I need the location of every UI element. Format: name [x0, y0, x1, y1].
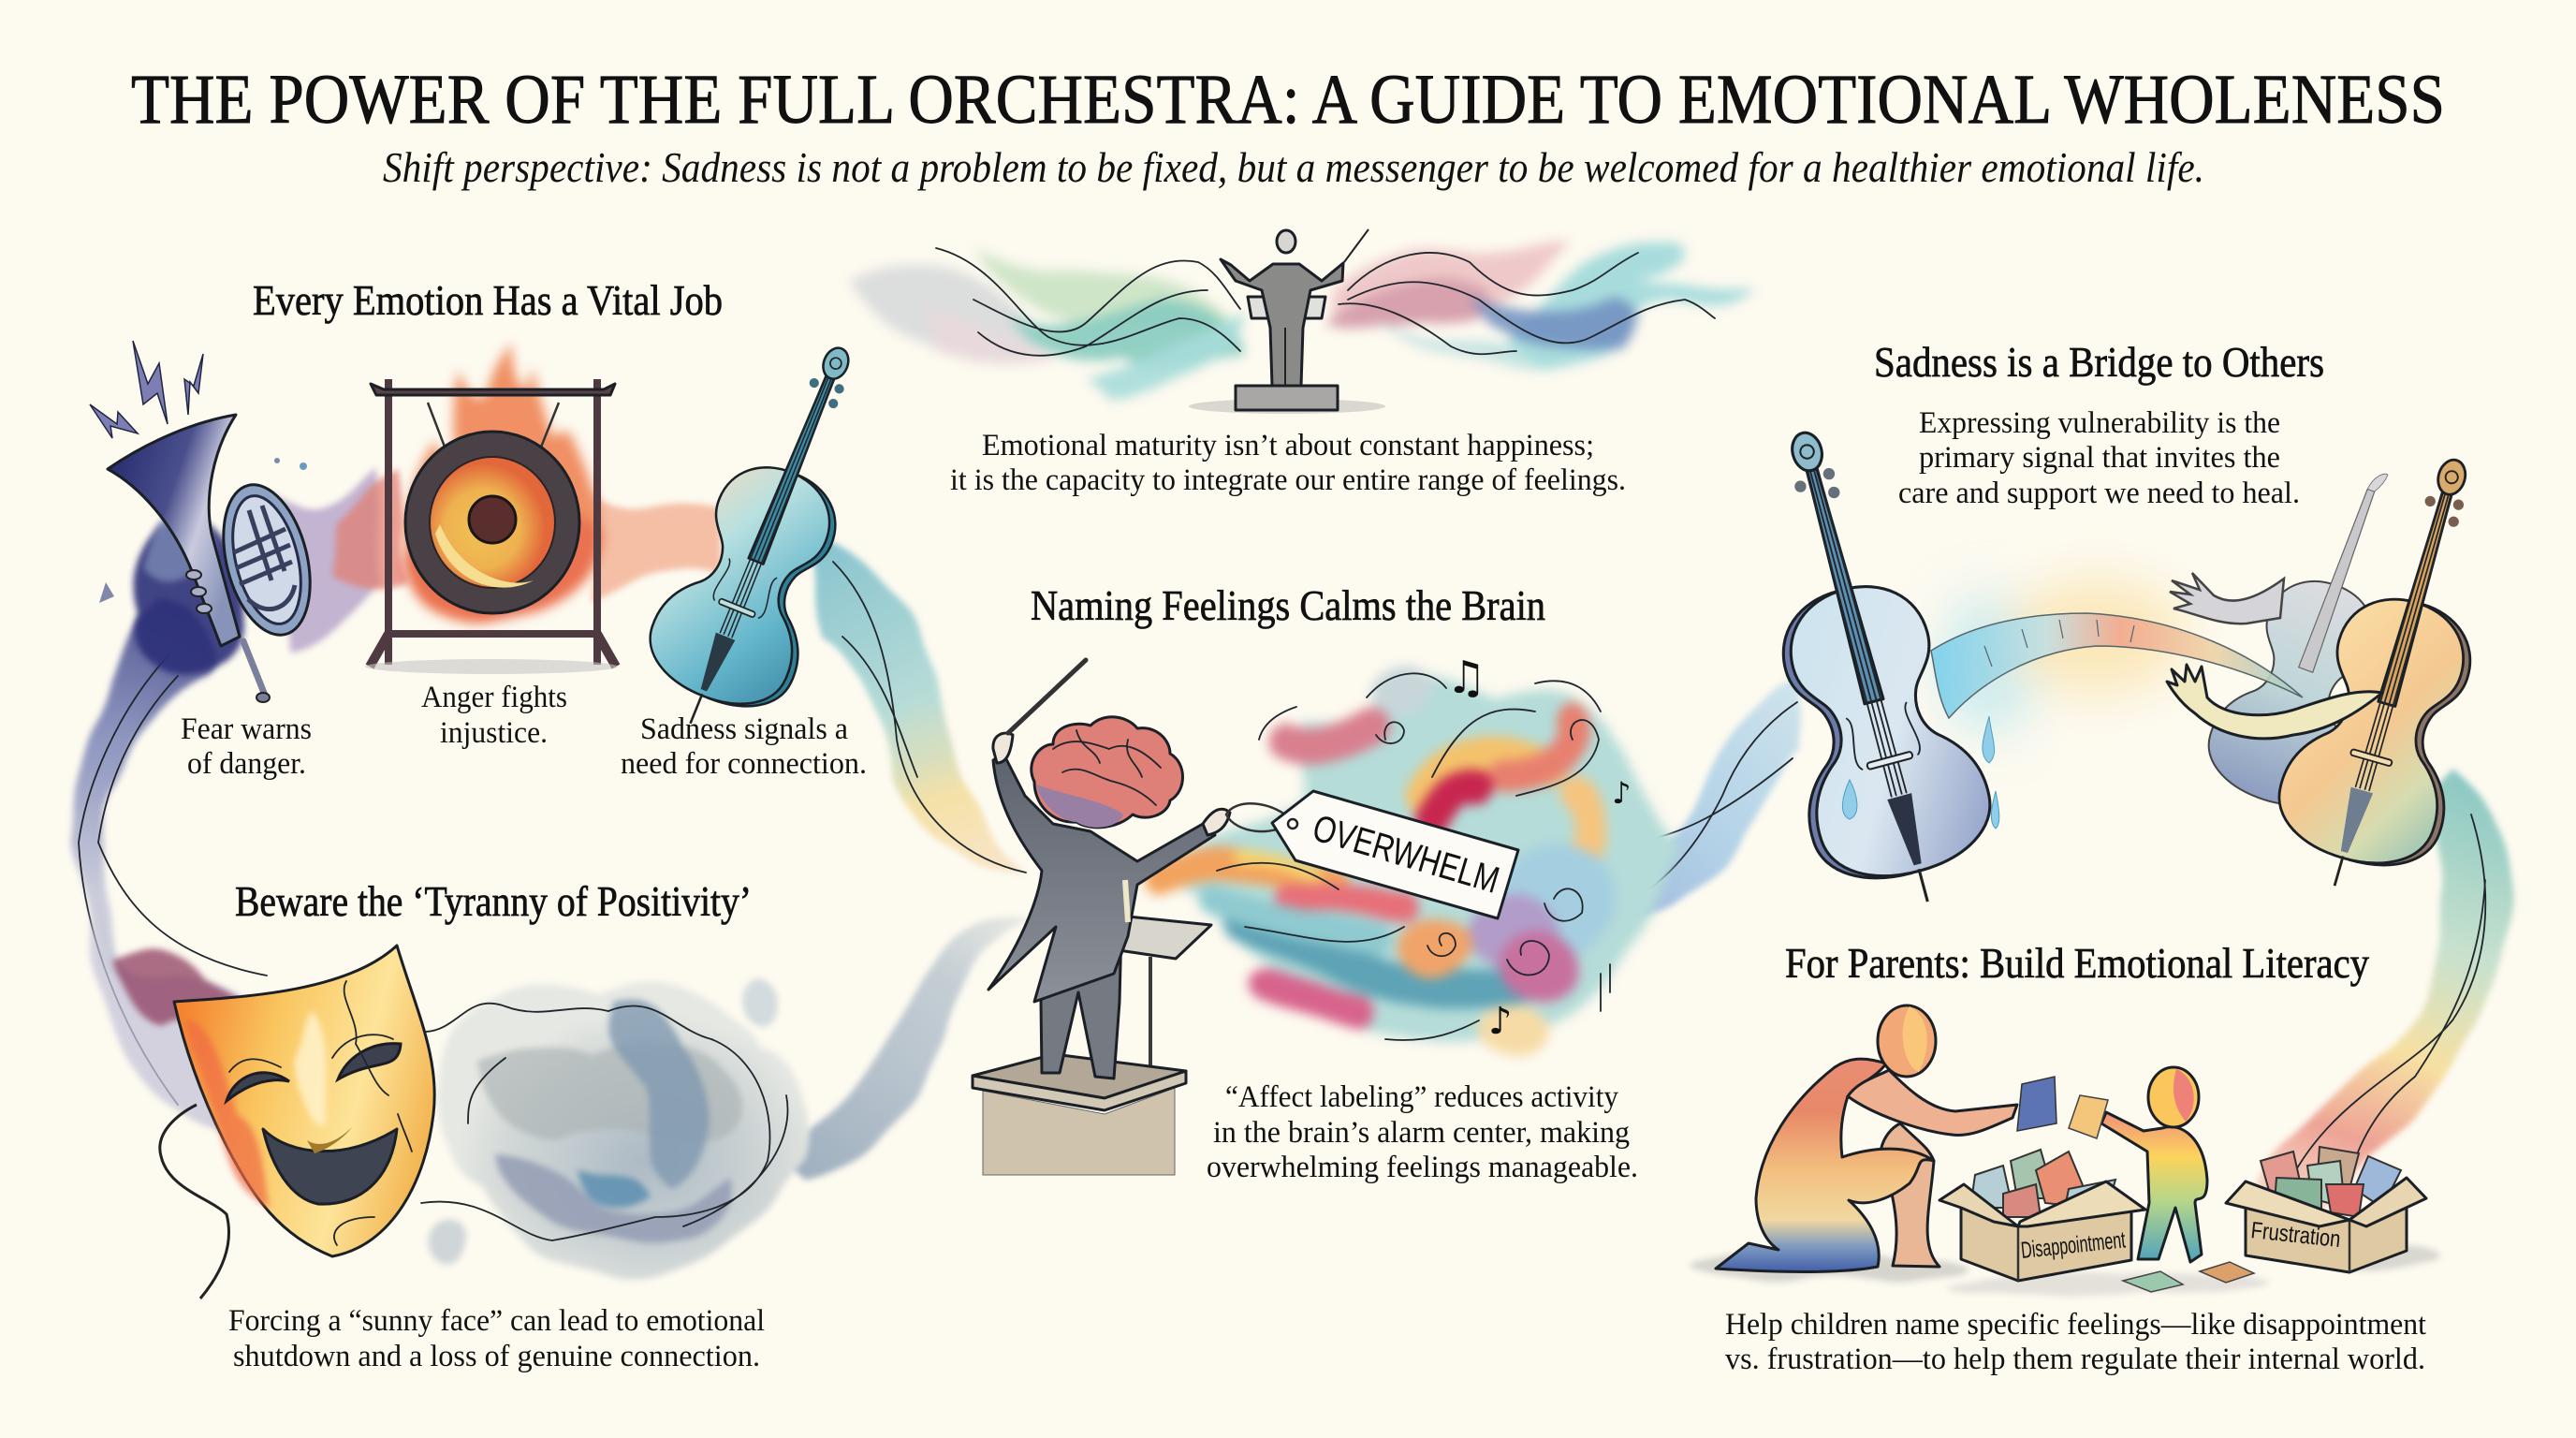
text: affect labeling — [1207, 1080, 1638, 1184]
text: expressing vulnerability — [1898, 406, 2300, 510]
wash: grey smoke cloud — [421, 977, 812, 1279]
text: expressing vulnerability: primary signal that invites the — [1919, 441, 2280, 475]
icon: ghost cello reaching hand — [2170, 573, 2284, 624]
text: expressing vulnerability: Expressing vulnerability is the — [1919, 406, 2280, 440]
panel: for parents — [1685, 940, 2434, 1376]
icon: music notes — [1446, 652, 1631, 1043]
icon: music notes: ♪ — [1612, 775, 1631, 811]
icon: comedy mask — [160, 946, 434, 1299]
icon: small conductor on podium — [1189, 229, 1385, 414]
icon: frustration box — [2226, 1147, 2426, 1272]
heading: Sadness is a Bridge to Others — [1874, 339, 2324, 386]
text: expressing vulnerability: care and support we need to heal. — [1898, 477, 2300, 510]
text: help children: Help children name specific feelings—like disappointment — [1725, 1308, 2426, 1342]
icon: cards on floor — [2123, 1262, 2254, 1292]
ribbon: warm cello to frustration box — [2251, 768, 2510, 1226]
icon: brain — [1032, 717, 1183, 828]
icon: music notes: ♪ — [1488, 1000, 1513, 1043]
wash: swirling emotion cloud — [1148, 668, 1685, 1056]
text: emotional maturity — [950, 429, 1626, 497]
text: affect labeling: overwhelming feelings manageable. — [1207, 1151, 1638, 1184]
ribbon: overwhelm to blue cello — [1554, 674, 1802, 927]
wash: right sound waves — [1327, 241, 1755, 368]
wash: ground shadow — [1685, 1245, 2434, 1296]
icon: anger gong — [365, 379, 618, 674]
podium — [973, 1054, 1186, 1175]
wash: bridge glow — [1942, 580, 2186, 735]
text: affect labeling: “Affect labeling” reduces activity — [1225, 1080, 1618, 1114]
icon: parent figure — [1716, 1005, 2056, 1272]
icon: disappointment box — [1939, 1150, 2145, 1281]
text: sunny face: shutdown and a loss of genuine connection. — [233, 1340, 760, 1373]
label: sadness — [621, 712, 867, 781]
callout: overwhelm tag — [1272, 791, 1518, 918]
panel: sadness is a bridge to others — [1711, 339, 2539, 926]
icon: teardrops — [1842, 716, 1999, 829]
heading: For Parents: Build Emotional Literacy — [1785, 940, 2369, 987]
icon: child figure — [2069, 1067, 2207, 1262]
text: affect labeling: in the brain’s alarm center, making — [1213, 1116, 1630, 1150]
heading: Naming Feelings Calms the Brain — [1031, 582, 1545, 629]
icon: fear horn — [90, 341, 325, 702]
text: sunny face — [228, 1304, 765, 1373]
icon: warm cello reaching arm — [2167, 665, 2382, 739]
text: help children — [1725, 1308, 2426, 1376]
label: fear: of danger. — [187, 747, 306, 781]
heading: Beware the ‘Tyranny of Positivity’ — [235, 878, 752, 925]
icon: lightning bolts — [90, 341, 203, 438]
label: sadness: need for connection. — [621, 747, 867, 781]
panel: every emotion has a vital job — [90, 277, 915, 781]
icon: blue sad cello — [1711, 411, 2012, 926]
text: emotional maturity: it is the capacity to integrate our entire range of feelings. — [950, 463, 1626, 497]
ribbon: cello to conductor — [805, 534, 1030, 875]
label: anger: injustice. — [440, 716, 548, 750]
panel: naming feelings calms the brain — [973, 582, 1685, 1184]
label: anger — [421, 681, 567, 750]
text: sunny face: Forcing a “sunny face” can lead to emotional — [228, 1304, 765, 1338]
wash: left sound waves — [847, 248, 1245, 401]
label: anger: Anger fights — [421, 681, 567, 714]
icon: flames — [402, 343, 599, 625]
panel: conductor and integration — [847, 229, 1755, 497]
icon: rainbow bridge — [1931, 613, 2303, 718]
icon: disappointment box: Disappointment — [2020, 1226, 2127, 1264]
subtitle: Shift perspective: Sadness is not a problem to be fixed, but a messenger to be welcomed for a healthier emotional life. — [383, 143, 2204, 191]
panel: beware the tyranny of positivity — [160, 878, 812, 1373]
label: sadness: Sadness signals a — [640, 712, 848, 746]
label: fear: Fear warns — [181, 712, 312, 746]
label: fear — [181, 712, 312, 781]
ribbon: horn to mask — [73, 599, 267, 1133]
icon: warm cello — [2259, 438, 2539, 910]
icon: conductor with brain head — [973, 660, 1518, 1175]
text: help children: vs. frustration—to help them regulate their internal world. — [1725, 1343, 2425, 1376]
icon: frustration box: Frustration — [2249, 1217, 2342, 1253]
icon: ghost cello — [2196, 448, 2441, 821]
callout: overwhelm tag: OVERWHELM — [1308, 807, 1503, 902]
icon: music notes: ♫ — [1446, 652, 1486, 704]
text: emotional maturity: Emotional maturity isn’t about constant happiness; — [982, 429, 1594, 462]
wash between instruments — [271, 468, 721, 655]
ribbon: grey smoke tail to conductor — [777, 917, 1034, 1181]
icon: sadness cello — [623, 322, 915, 753]
heading: Every Emotion Has a Vital Job — [253, 277, 723, 324]
